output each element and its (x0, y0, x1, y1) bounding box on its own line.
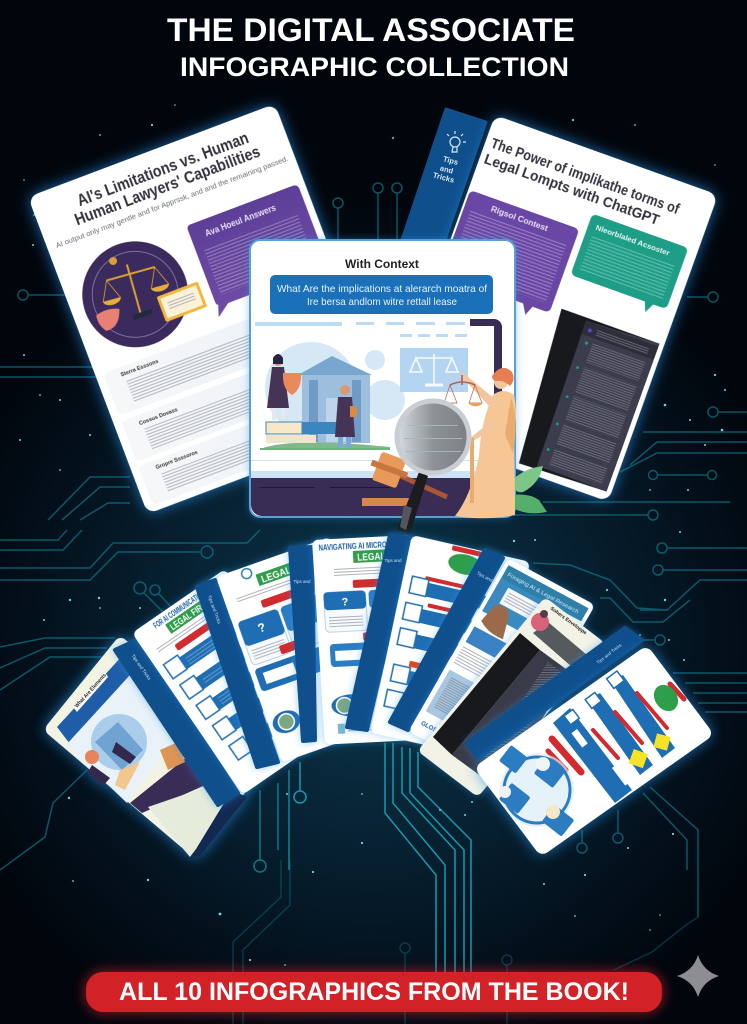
yellow certificate label (157, 281, 207, 322)
icon: leaves (510, 466, 547, 513)
tab: fan card 4: Tips and (293, 579, 311, 584)
green speech bubble: Nleorblaled Acsoster (595, 223, 671, 258)
panel: fan card 4 navigating AI: ? (341, 596, 349, 609)
laptop frame (470, 319, 502, 480)
icon: sparkle watermark (677, 955, 719, 997)
prompt box: Ire bersa andlom witre rettall lease (307, 296, 457, 308)
grey chat area (452, 650, 570, 790)
card heading: Legal Lompts with ChatGPT (482, 151, 662, 229)
yellow diamonds (629, 733, 671, 768)
tab: fan card 6 (390, 550, 503, 730)
illustration: lady justice (444, 368, 516, 518)
panel: fan card 6 blue report: Foraging AI & Legal Research (506, 572, 579, 615)
list panel: judgement (138, 376, 391, 506)
title (167, 12, 575, 82)
panel: fan card 2 AI legal first (132, 569, 336, 795)
list panel: judgement: Gropre Ssssoros (155, 450, 199, 471)
label: What Are Elements (74, 673, 108, 709)
panel: fan card 8 process flow (474, 645, 714, 857)
tab: fan card 8: Tips and Tricks (596, 642, 623, 665)
banner: all 10 infographics (86, 972, 662, 1012)
card heading: AI's Limitations vs. Human (74, 128, 251, 210)
card heading: Sohers Enveloppe (549, 606, 588, 636)
panel: fan card 2 AI legal first: FOR AI COMMUNICATION (152, 589, 206, 630)
tab: fan card 5: Tips and (384, 558, 402, 563)
icon: gavel (362, 451, 447, 506)
icon: person (531, 610, 549, 631)
icon: magnifying glass (397, 401, 469, 534)
footer band (251, 460, 514, 516)
title: INFOGRAPHIC COLLECTION (180, 52, 569, 82)
panel: fan card 4 navigating AI: NAVIGATING AI MICROSOFT (318, 538, 404, 553)
purple speech bubble: Ava Hoeul Answers (204, 203, 277, 238)
figure: lawyer with book (335, 385, 357, 448)
panel: fan card 6 blue report: GLOSSARY (420, 721, 452, 742)
card heading: The Power of implikathe torms of (489, 135, 682, 218)
tab: tips and tricks behind right card (402, 109, 486, 240)
panel: AI's limitations infographic card (28, 104, 395, 514)
prompt box (270, 275, 493, 314)
panel: fan card 4 navigating AI (312, 535, 425, 745)
list panel: sources: Sterra Esssons (120, 359, 159, 378)
card subtitle: AI output only may gentle and for Apprssk, and and the remaining passed. (54, 154, 289, 250)
purple speech bubble: Rigsol Contest (490, 204, 549, 233)
purple speech bubble (437, 190, 579, 322)
white icon boxes (564, 671, 631, 786)
dark chat screenshot (508, 309, 659, 494)
tab label: Tips (442, 154, 459, 167)
list panel: counsel: Cossus Dovass (138, 407, 179, 427)
scales image panel (400, 348, 468, 392)
card heading: Human Lawyers' Capabilities (72, 142, 263, 229)
icon rows (167, 615, 308, 763)
panel: fan card 7 chat screenshot (417, 597, 605, 797)
tab: fan card 3: Tips and Tricks (207, 594, 222, 625)
tab: fan card 8 (467, 628, 642, 758)
panel: fan card 3 legal first (216, 537, 396, 763)
icon: lightbulb (447, 131, 466, 152)
green speech bubble (567, 214, 688, 319)
red tags (548, 684, 684, 772)
tab label: and (439, 164, 455, 176)
black sidebar (433, 633, 540, 755)
panel: power of legal prompts card (342, 99, 718, 502)
illustration: courthouse with lawyers (260, 342, 405, 450)
list panel: sources (103, 284, 358, 416)
tab: fan card 2 (115, 640, 238, 805)
list panel: counsel (121, 331, 375, 462)
panel: fan card 3 legal first: LEGAL FIRST (260, 555, 320, 586)
tab: fan card 5 (347, 535, 412, 730)
tab: fan card 4 (290, 547, 315, 741)
title: THE DIGITAL ASSOCIATE (167, 12, 575, 48)
star dust dots (19, 104, 726, 966)
document placeholder bars (255, 322, 467, 337)
process bars (553, 675, 675, 803)
tab: fan card 6: Tips and (476, 570, 494, 583)
panel: fan card 2 AI legal first: LEGAL FIRST (168, 598, 212, 632)
card heading: With Context (345, 257, 419, 271)
purple speech bubble (184, 184, 332, 317)
speech bubble (533, 622, 587, 667)
panel: with context center card (250, 240, 515, 517)
panel: fan card 6 blue report (408, 558, 595, 778)
tab label (432, 154, 459, 185)
icon: scales of justice in dark circle (67, 226, 204, 363)
green decision ellipse (649, 680, 683, 716)
panel: fan card 1 context elements (43, 635, 270, 857)
panel: fan card 3 legal first: ? (256, 620, 267, 636)
cycle diagram (499, 745, 574, 837)
tab: fan card 2: Tips and Tricks (131, 653, 152, 682)
panel: fan card 5 process rows (370, 535, 530, 759)
tab: fan card 3 (197, 580, 278, 767)
prompt box: What Are the implications at alerarch moatra of (277, 283, 487, 295)
tab label: Tricks (432, 170, 455, 185)
banner: all 10 infographics: ALL 10 INFOGRAPHICS FROM THE BOOK! (119, 978, 629, 1006)
figure: lawyer with shield (267, 354, 301, 420)
white label strip (73, 672, 108, 712)
panel: fan card 4 navigating AI: LEGAL PIE (357, 551, 402, 564)
